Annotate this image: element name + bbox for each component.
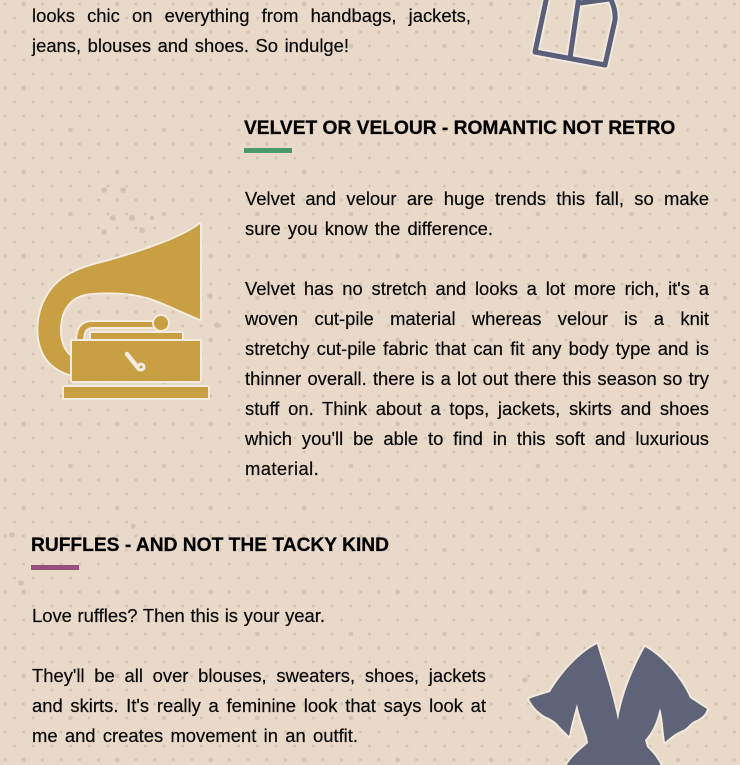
cabinet xyxy=(72,341,200,381)
heading: ruffles: RUFFLES - AND NOT THE TACKY KIND xyxy=(31,535,389,556)
arm ball xyxy=(154,316,168,330)
text block: velvet intro xyxy=(245,188,709,240)
accent bar: purple xyxy=(31,565,79,570)
platter xyxy=(91,333,182,339)
horn xyxy=(38,224,200,376)
text: woven cut-pile material whereas velour is a knit xyxy=(245,308,709,329)
text: They'll be all over blouses, sweaters, shoes, jackets xyxy=(32,665,486,686)
text: Velvet and velour are huge trends this fall, so make xyxy=(245,188,709,209)
text: stretchy cut-pile fabric that can fit any body type and is xyxy=(245,338,709,359)
text: looks chic on everything from handbags, jackets, xyxy=(32,5,471,26)
text: Velvet has no stretch and looks a lot more rich, it's a xyxy=(245,278,709,299)
text: stuff on. Think about a tops, jackets, skirts and shoes xyxy=(245,398,709,419)
text block: ruffles intro: Love ruffles? Then this is your year. xyxy=(32,605,325,626)
text: sure you know the difference. xyxy=(245,218,493,239)
text block: intro ending xyxy=(31,5,471,56)
accent bar: green xyxy=(244,148,292,153)
base xyxy=(64,387,208,398)
text: which you'll be able to find in this soft and luxurious xyxy=(245,428,709,449)
text: thinner overall. there is a lot out there this season so try xyxy=(245,368,709,389)
heading: velvet or velour: VELVET OR VELOUR - ROMANTIC NOT RETRO xyxy=(244,118,675,139)
text: me and creates movement in an outfit. xyxy=(32,725,358,746)
text: jeans, blouses and shoes. So indulge! xyxy=(32,35,349,56)
text: material. xyxy=(245,458,319,479)
tone arm xyxy=(77,322,158,341)
crank xyxy=(127,354,146,372)
text: and skirts. It's really a feminine look that says look at xyxy=(32,695,486,716)
text block: ruffles details xyxy=(32,665,486,746)
text block: velvet details xyxy=(244,278,710,479)
